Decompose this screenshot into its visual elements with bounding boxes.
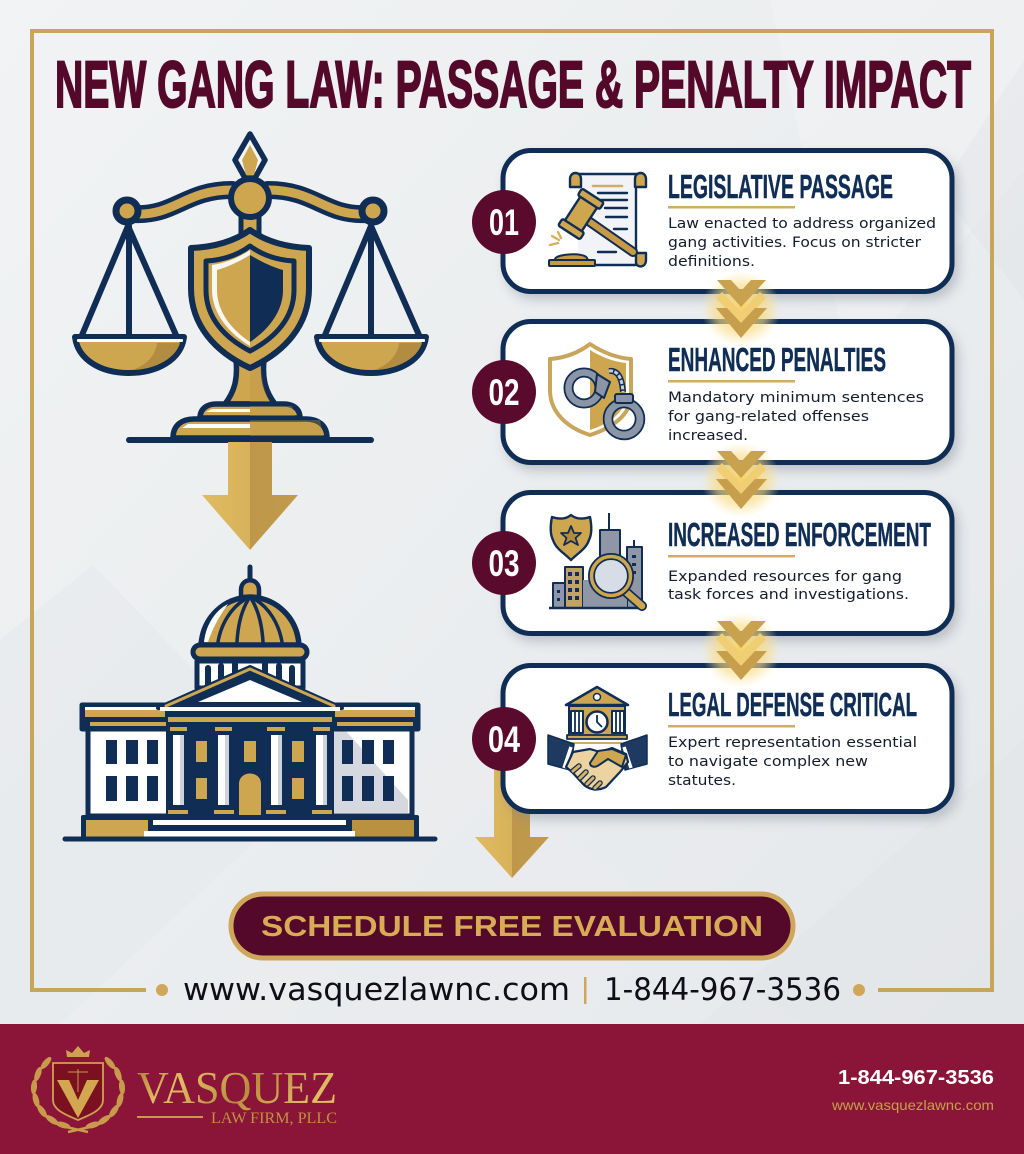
underline: step 4: [668, 725, 795, 728]
footer band: [0, 1024, 1024, 1154]
shield: [191, 230, 309, 368]
contact line: [156, 972, 865, 1008]
arrow: scales to capitol: [202, 442, 298, 550]
illustration: scales of justice with shield: [75, 134, 426, 440]
balance beam: [116, 179, 384, 235]
chevrons: step 2 to 3: [701, 442, 781, 518]
logo subtitle: LAW FIRM, PLLC: [211, 1110, 337, 1127]
description: Law enacted to address organized: [668, 215, 936, 232]
badge 01: 01: [489, 202, 519, 243]
pediment: [158, 667, 342, 711]
description: Expert representation essential: [668, 734, 917, 751]
description: definitions.: [668, 253, 755, 270]
base and steps: [65, 817, 435, 839]
underline: step 3: [668, 555, 795, 558]
chevrons: step 1 to 2: [701, 271, 781, 347]
footer phone: 1-844-967-3536: [838, 1067, 994, 1089]
description: Expanded resources for gang: [668, 568, 902, 585]
icon: shield and handcuffs: [550, 344, 640, 435]
badge 02: 02: [488, 372, 520, 413]
description: increased.: [668, 427, 748, 444]
panel: step 1 legislative passage: [503, 150, 952, 292]
right pan: [317, 226, 426, 373]
icon: gavel and scroll: [549, 173, 646, 266]
description: [668, 568, 909, 603]
badge 01: [472, 190, 536, 254]
description: gang activities. Focus on stricter: [668, 234, 921, 251]
icon: courthouse and handshake: [548, 687, 647, 789]
left wing: [82, 705, 172, 816]
icon: badge, city and magnifier: [549, 513, 645, 608]
badge 02: [472, 360, 536, 424]
description: [668, 389, 924, 444]
call to action button: SCHEDULE FREE EVALUATION: [261, 911, 763, 943]
badge 03: [472, 531, 536, 595]
description: [668, 215, 936, 270]
chevrons: step 3 to 4: [701, 612, 781, 688]
stem and base: [129, 360, 371, 440]
central portico: [168, 711, 332, 817]
description: for gang-related offenses: [668, 408, 869, 425]
right wing: [328, 705, 418, 816]
illustration: capitol building: [65, 567, 435, 839]
footer website: www.vasquezlawnc.com: [831, 1097, 994, 1113]
card shadows: [506, 156, 958, 819]
badge 03: 03: [488, 543, 520, 584]
underline: step 2: [668, 380, 795, 382]
underline: step 1: [668, 206, 795, 208]
finial: [235, 134, 265, 178]
call to action button: [231, 894, 793, 958]
panel: step 3 increased enforcement: [503, 492, 952, 634]
badge 04: 04: [488, 719, 520, 760]
left pan: [75, 226, 184, 373]
contact line: 1-844-967-3536: [604, 972, 841, 1008]
badge 04: [472, 707, 536, 771]
panel: step 4 legal defense critical: [503, 666, 952, 812]
description: [668, 734, 917, 789]
dome: [193, 567, 307, 688]
arrow: card 4 to call to action: [475, 770, 549, 878]
contact line: www.vasquezlawnc.com: [183, 972, 570, 1008]
description: to navigate complex new: [668, 753, 868, 770]
panel: step 2 enhanced penalties: [503, 322, 952, 462]
description: statutes.: [668, 772, 736, 789]
logo emblem: [30, 1046, 126, 1132]
logo rule: [137, 1116, 203, 1118]
description: Mandatory minimum sentences: [668, 389, 924, 406]
gold frame: [32, 31, 992, 990]
logo wordmark: VASQUEZ: [137, 1062, 337, 1113]
description: task forces and investigations.: [668, 586, 909, 603]
